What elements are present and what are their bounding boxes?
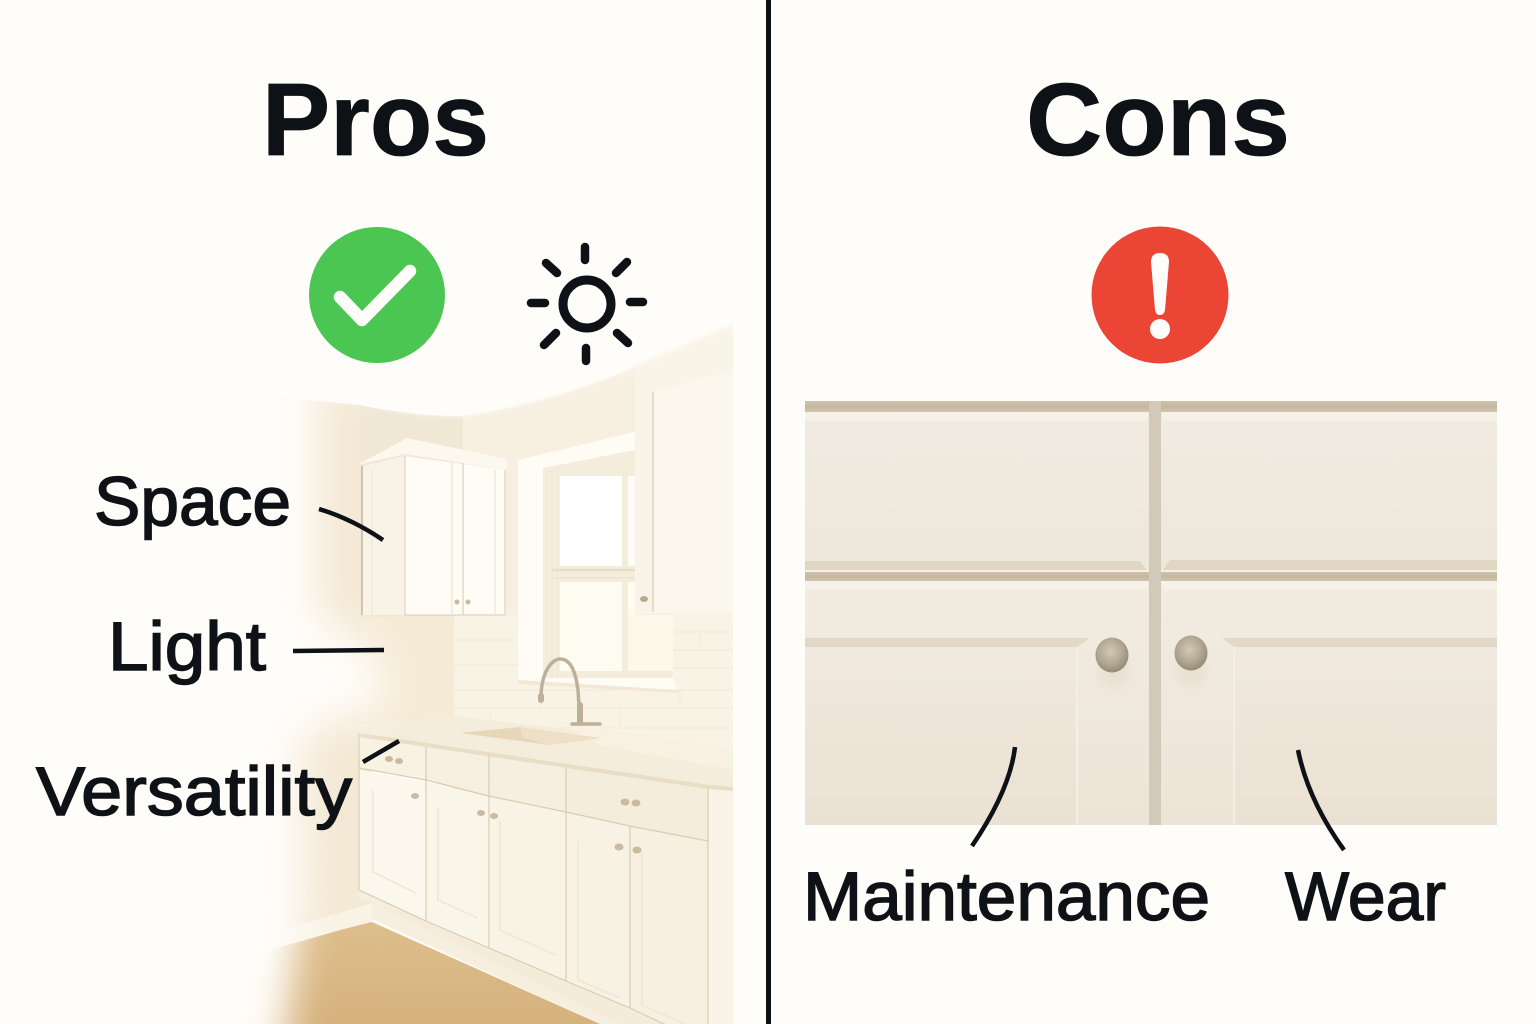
- icon: sun: [531, 247, 643, 361]
- leader: Light: [293, 650, 384, 651]
- back wall: [360, 405, 463, 730]
- upper left drawer: [805, 412, 1149, 572]
- panel: kitchen photo: [258, 323, 733, 1024]
- right wall: [454, 366, 733, 716]
- icon: red alert: [1092, 226, 1228, 364]
- label: Maintenance: Maintenance: [803, 858, 1210, 935]
- ceiling mask: [396, 322, 732, 418]
- leader: Maintenance: [972, 747, 1015, 846]
- door panels: [373, 790, 698, 1024]
- photo left fade: [100, 385, 392, 1024]
- leader: Wear: [1298, 750, 1344, 850]
- label: Wear: Wear: [1285, 858, 1446, 935]
- faucet: [541, 659, 600, 724]
- lower back wall: [360, 617, 456, 722]
- knobs: [385, 756, 642, 854]
- sink: [460, 727, 600, 745]
- top rail: [805, 401, 1497, 412]
- middle rail: [805, 572, 1497, 581]
- panel: cabinet close-up photo: [805, 401, 1497, 825]
- leader: Space: [319, 509, 383, 540]
- right upper cabinet: [635, 322, 733, 614]
- center divider: [766, 0, 771, 1024]
- icon: green check: [309, 227, 445, 363]
- upper right drawer: [1161, 412, 1497, 572]
- drawers: [360, 738, 426, 779]
- countertop: [345, 716, 733, 791]
- right knob: [1174, 636, 1208, 686]
- left knob: [1096, 638, 1129, 688]
- lower left door: [805, 581, 1149, 825]
- upper cabinet: [357, 438, 507, 615]
- label: Light: Light: [108, 608, 266, 685]
- baseboard: [272, 903, 372, 949]
- leader: Versatility: [363, 741, 399, 762]
- label: Versatility: Versatility: [36, 753, 353, 830]
- label: Space: Space: [94, 463, 291, 540]
- backsplash: [455, 616, 733, 728]
- left wall: [286, 400, 372, 929]
- doors: [359, 770, 426, 921]
- wood floor: [258, 922, 600, 1024]
- plinth: [372, 903, 733, 1024]
- base cabinets: [359, 733, 733, 1024]
- heading: Pros: Pros: [262, 62, 489, 177]
- mullion: [1149, 401, 1161, 581]
- lower right door: [1161, 581, 1497, 825]
- heading: Cons: Cons: [1026, 62, 1290, 177]
- window: [518, 432, 678, 693]
